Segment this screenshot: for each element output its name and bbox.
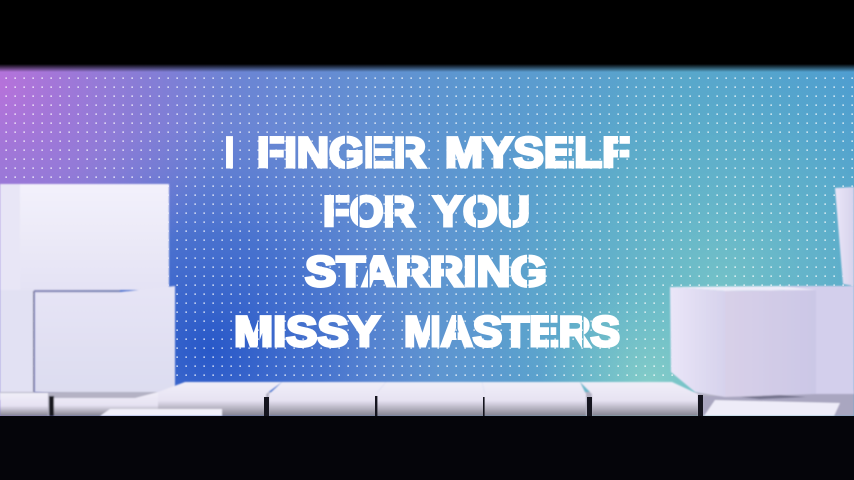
title line: MISSY MASTERS: MASTERS bbox=[404, 308, 620, 356]
title line: I FINGER MYSELF bbox=[226, 136, 630, 169]
left stacked cubes bbox=[0, 184, 175, 400]
top letterbox band bbox=[0, 0, 854, 72]
floor tile gaps bbox=[264, 395, 703, 416]
title line: MISSY MASTERS: MISSY bbox=[234, 308, 380, 356]
title line: MISSY MASTERS bbox=[236, 314, 620, 348]
floor tiles row bbox=[0, 382, 854, 416]
gradient background panel bbox=[0, 60, 854, 420]
title text block bbox=[225, 129, 630, 356]
bottom letterbox band bbox=[0, 416, 854, 480]
title line: FOR YOU: FOR bbox=[323, 188, 415, 236]
right stacked cubes bbox=[670, 187, 854, 399]
title line: FOR YOU: YOU bbox=[433, 188, 530, 236]
title line: I FINGER MYSELF: MYSELF bbox=[445, 129, 630, 177]
title line: STARRING: STARRING bbox=[305, 248, 547, 296]
title line: I FINGER MYSELF: I bbox=[225, 129, 234, 177]
title line: FOR YOU bbox=[324, 194, 529, 228]
title line: I FINGER MYSELF: FINGER bbox=[257, 129, 426, 177]
